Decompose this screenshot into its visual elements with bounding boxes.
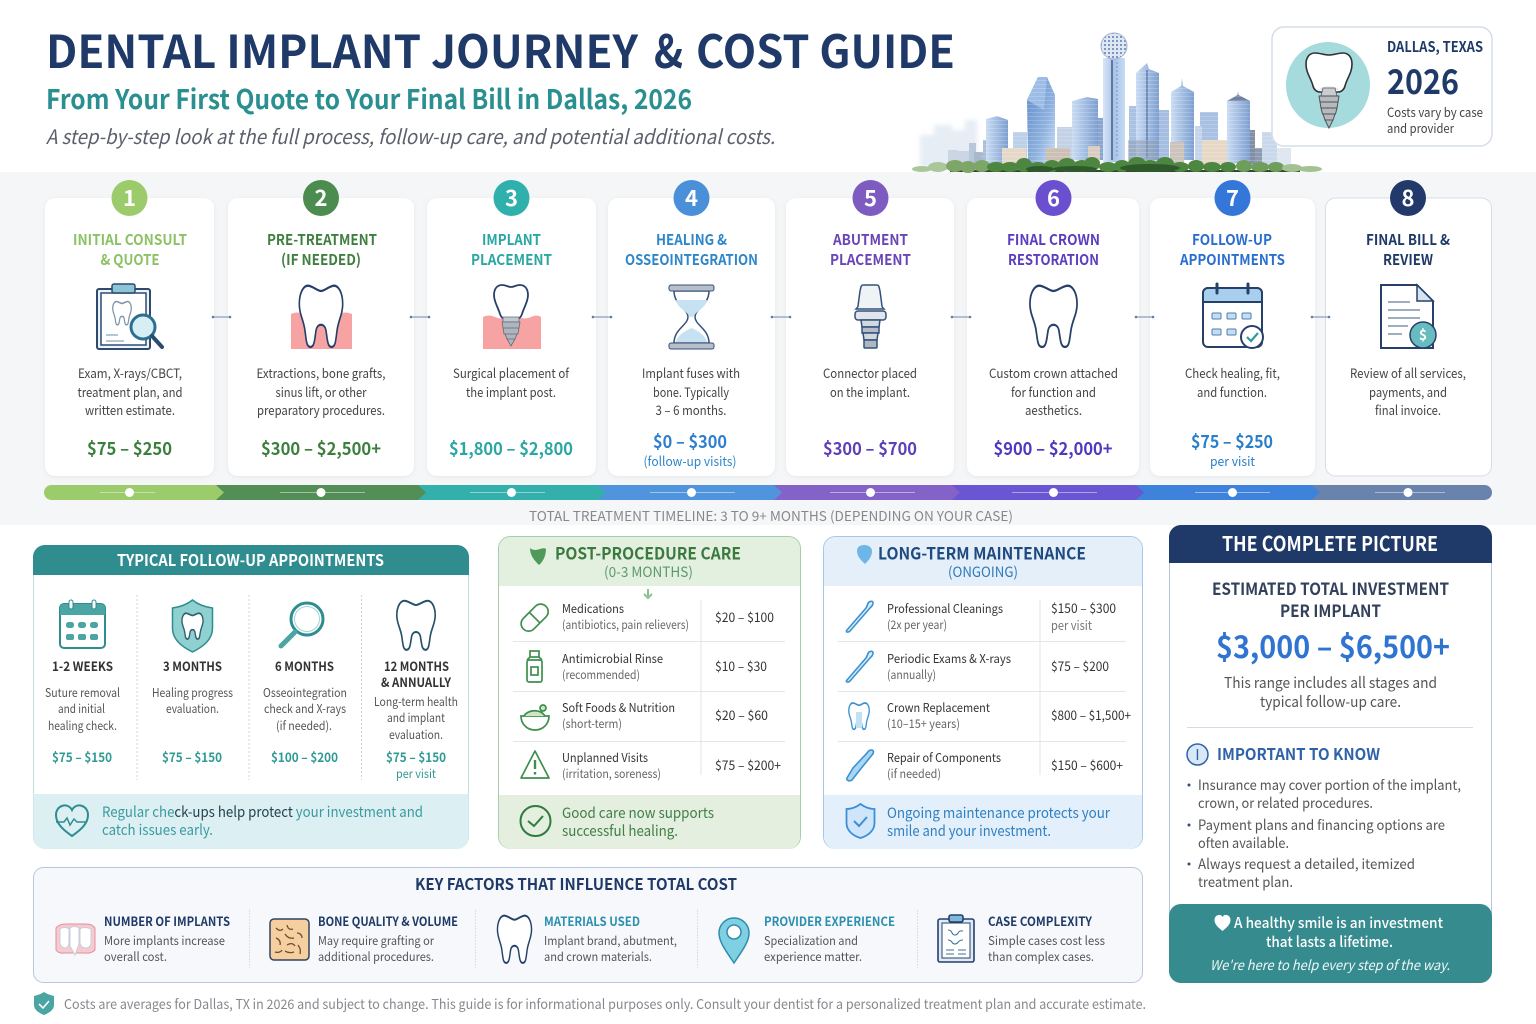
factor: bone quality: May require grafting or	[318, 932, 434, 949]
description	[453, 363, 570, 401]
heading: REVIEW	[1383, 249, 1433, 270]
panel header: (0-3 MONTHS)	[604, 562, 693, 582]
factor: bone quality	[270, 911, 458, 965]
heading: PRE-TREATMENT	[267, 229, 377, 250]
panel: typical follow-up appointments	[33, 545, 469, 849]
step number 8	[1390, 180, 1426, 216]
row: soft foods: Soft Foods & Nutrition	[562, 699, 675, 716]
column: 1-2 weeks: and initial	[58, 700, 105, 717]
step number 5	[852, 180, 888, 216]
row: periodic exams	[846, 650, 1109, 683]
panel header: POST-PROCEDURE CARE	[555, 540, 741, 564]
heading	[267, 229, 377, 270]
bullet list: treatment plan.	[1198, 872, 1293, 892]
callout: ongoing maintenance: Ongoing maintenance protects your	[887, 802, 1110, 823]
investment range: $3,000 – $6,500+	[1216, 623, 1450, 667]
location card	[1272, 27, 1492, 146]
timeline caption: TOTAL TREATMENT TIMELINE: 3 TO 9+ MONTHS (DEPENDING ON YOUR CASE)	[529, 505, 1013, 525]
illustration: Dallas skyline	[912, 33, 1322, 173]
icon: teeth row	[56, 924, 95, 955]
callout: ongoing maintenance: smile and your investment.	[887, 820, 1051, 841]
icon: dental probe	[846, 651, 873, 682]
icon: crown tooth	[1030, 286, 1077, 347]
step number 8: 8	[1402, 181, 1414, 213]
row: repair of components: $150 – $600+	[1051, 755, 1123, 774]
step number 7	[1214, 180, 1250, 216]
description: preparatory procedures.	[257, 400, 385, 419]
heading: IMPLANT	[482, 229, 541, 250]
row: soft foods: (short-term)	[562, 715, 622, 732]
description: final invoice.	[1375, 400, 1441, 419]
description: Check healing, fit,	[1185, 363, 1280, 382]
icon: bottle	[527, 651, 542, 682]
description	[1350, 363, 1466, 419]
heading: PLACEMENT	[830, 249, 911, 270]
step number 4: 4	[685, 181, 698, 213]
factor: case complexity: CASE COMPLEXITY	[988, 911, 1093, 930]
icon: heartbeat	[56, 805, 88, 836]
location text: Costs vary by case	[1387, 102, 1483, 121]
row: crown replacement: Crown Replacement	[887, 699, 990, 716]
column: 3 months: $75 – $150	[162, 747, 222, 766]
icon: Reunion Tower	[1101, 33, 1127, 162]
title	[46, 16, 955, 82]
panel: step 2 pre-treatment	[228, 180, 414, 476]
description	[989, 363, 1118, 419]
title: DENTAL IMPLANT JOURNEY	[46, 16, 639, 82]
column: 12 months: and implant	[387, 709, 445, 726]
row: crown replacement: $800 – $1,500+	[1051, 705, 1131, 724]
row: medications: (antibiotics, pain relievers)	[562, 616, 689, 633]
panel header	[1169, 525, 1492, 563]
factor: provider experience: Specialization and	[764, 932, 858, 949]
callout: regular check-ups	[34, 794, 468, 849]
row: professional cleanings: Professional Cleanings	[887, 600, 1003, 617]
icon: shield check	[846, 804, 874, 838]
investment heading: ESTIMATED TOTAL INVESTMENT	[1212, 575, 1449, 600]
icon: bowl	[521, 705, 549, 730]
factor: materials used: MATERIALS USED	[544, 911, 640, 930]
row: medications: $20 – $100	[715, 607, 774, 626]
icon: invoice	[1381, 285, 1436, 348]
description: Surgical placement of	[453, 363, 570, 382]
heading	[1366, 229, 1450, 270]
price: $300 – $700	[823, 436, 917, 461]
column: 1-2 weeks: 1-2 WEEKS	[52, 656, 113, 675]
column: 6 months: check and X-rays	[264, 700, 346, 717]
icon: toothbrush	[846, 601, 873, 632]
icon: hourglass	[669, 285, 714, 349]
heading: ABUTMENT	[832, 229, 908, 250]
icon: droplet shield	[857, 545, 872, 564]
factor: bone quality: additional procedures.	[318, 948, 434, 965]
callout: good care: Good care now supports	[562, 802, 714, 823]
heading	[1007, 229, 1100, 270]
callout: ongoing maintenance	[824, 795, 1142, 849]
price: $0 – $300	[653, 429, 727, 454]
heading	[1179, 229, 1285, 270]
icon: shield	[34, 992, 54, 1015]
column: 3 months: 3 MONTHS	[163, 656, 222, 675]
column: 6 months: (if needed).	[276, 717, 332, 734]
important to know heading: IMPORTANT TO KNOW	[1217, 741, 1380, 765]
column: 1-2 weeks: Suture removal	[45, 684, 120, 701]
price	[644, 429, 736, 470]
row: crown replacement: (10–15+ years)	[887, 715, 960, 732]
row: antimicrobial rinse: Antimicrobial Rinse	[562, 650, 663, 667]
panel: step 5 abutment	[786, 180, 954, 476]
row: soft foods	[521, 699, 768, 732]
step number 6: 6	[1047, 181, 1060, 213]
heading	[830, 229, 911, 270]
column: 12 months: per visit	[396, 765, 436, 782]
range note: This range includes all stages and	[1224, 672, 1437, 693]
step number 1: 1	[123, 181, 136, 213]
factor: provider experience: experience matter.	[764, 948, 862, 965]
heading: (IF NEEDED)	[281, 249, 361, 270]
column: 6 months: Osseointegration	[263, 684, 347, 701]
heading: FOLLOW-UP	[1192, 229, 1272, 250]
row: medications	[518, 600, 774, 634]
callout: healthy smile: that lasts a lifetime.	[1266, 931, 1393, 952]
price	[1191, 429, 1273, 470]
panel: step 4 healing	[608, 180, 775, 476]
description: Extractions, bone grafts,	[256, 363, 386, 382]
description: the implant post.	[466, 382, 556, 401]
step number 6	[1036, 180, 1072, 216]
range note	[1224, 672, 1437, 712]
factor: materials used: and crown materials.	[544, 948, 652, 965]
icon: check circle	[520, 806, 550, 836]
column: 6 months: 6 MONTHS	[275, 656, 334, 675]
bullet list: often available.	[1198, 833, 1289, 853]
column: 3 months: evaluation.	[166, 700, 219, 717]
tagline: A step-by-step look at the full process, follow-up care, and potential additional costs.	[46, 121, 775, 150]
row: professional cleanings: per visit	[1051, 615, 1092, 634]
step number 3: 3	[505, 181, 518, 213]
bullet list: Insurance may cover portion of the implant,	[1198, 775, 1461, 795]
description	[256, 363, 386, 419]
column: 1-2 weeks: healing check.	[48, 717, 117, 734]
factor: bone quality: BONE QUALITY & VOLUME	[318, 911, 458, 930]
description	[823, 363, 917, 401]
panel header	[824, 537, 1142, 586]
column: 1-2 weeks	[45, 600, 120, 766]
description	[642, 363, 740, 419]
investment heading	[1212, 575, 1449, 622]
heading: OSSEOINTEGRATION	[625, 249, 758, 270]
panel header	[499, 537, 800, 598]
description: bone. Typically	[653, 382, 729, 401]
callout: healthy smile	[1169, 904, 1492, 983]
column: 12 months: Long-term health	[374, 693, 458, 710]
step number 2: 2	[315, 181, 327, 213]
location text: DALLAS, TEXAS	[1387, 36, 1483, 57]
panel header: TYPICAL FOLLOW-UP APPOINTMENTS	[117, 547, 384, 571]
icon: dental implant	[1286, 42, 1370, 128]
icon: magnifier	[281, 603, 323, 646]
icon: info	[1187, 744, 1208, 765]
description: written estimate.	[85, 400, 175, 419]
row: crown replacement	[849, 699, 1131, 732]
factor: case complexity: Simple cases cost less	[988, 932, 1105, 949]
row: professional cleanings: $150 – $300	[1051, 598, 1116, 617]
column: 6 months	[263, 603, 347, 766]
row: repair of components: (if needed)	[887, 765, 941, 782]
icon: warning triangle	[521, 751, 549, 778]
row: soft foods: $20 – $60	[715, 705, 768, 724]
factor: materials used: Implant brand, abutment,	[544, 932, 677, 949]
description: 3 – 6 months.	[656, 400, 726, 419]
column: 12 months	[374, 601, 458, 782]
panel header: (ONGOING)	[948, 562, 1018, 582]
description: Exam, X-rays/CBCT,	[78, 363, 182, 382]
location text: and provider	[1387, 118, 1454, 137]
icon: clipboard chart	[938, 915, 974, 962]
callout: good care	[499, 795, 800, 849]
price: $75 – $250	[87, 436, 172, 461]
title: COST GUIDE	[696, 16, 955, 82]
column: 12 months: 12 MONTHS	[384, 656, 449, 675]
heading: HEALING &	[656, 229, 727, 250]
factor: number of implants: More implants increase	[104, 932, 225, 949]
heading: FINAL CROWN	[1007, 229, 1100, 250]
icon: leaf	[530, 548, 546, 565]
heading: APPOINTMENTS	[1179, 249, 1285, 270]
panel: step 1 initial consult	[45, 180, 214, 476]
icon: tooth shield	[172, 600, 212, 652]
factor: provider experience	[719, 911, 895, 965]
column: 3 months: Healing progress	[152, 684, 233, 701]
panel header	[33, 545, 469, 575]
row: repair of components: Repair of Components	[887, 749, 1001, 766]
description: for function and	[1011, 382, 1096, 401]
description: on the implant.	[830, 382, 910, 401]
icon: clipboard and magnifier	[97, 284, 162, 349]
factor: materials used	[497, 911, 677, 965]
description: treatment plan, and	[78, 382, 182, 401]
description: and function.	[1197, 382, 1267, 401]
panel: post-procedure care	[498, 536, 800, 849]
price: $75 – $250	[1191, 429, 1273, 454]
heading	[471, 229, 552, 270]
panel heading: KEY FACTORS THAT INFLUENCE TOTAL COST	[415, 871, 737, 895]
icon: calendar with check	[1203, 284, 1263, 348]
column: 12 months: $75 – $150	[386, 747, 446, 766]
price: $1,800 – $2,800	[449, 436, 573, 461]
row: repair of components	[847, 749, 1123, 782]
callout: healthy smile: A healthy smile is an investment	[1234, 912, 1443, 933]
row: professional cleanings: (2x per year)	[887, 616, 947, 633]
row: antimicrobial rinse	[527, 650, 767, 683]
row: unplanned visits: (irritation, soreness)	[562, 765, 661, 782]
heading: PLACEMENT	[471, 249, 552, 270]
step number 4	[674, 180, 710, 216]
heading: FINAL BILL &	[1366, 229, 1450, 250]
heading	[625, 229, 758, 270]
column: 12 months: & ANNUALLY	[381, 672, 451, 691]
row: professional cleanings	[846, 598, 1116, 634]
step number 1	[112, 180, 148, 216]
bullet list: crown, or related procedures.	[1198, 793, 1373, 813]
panel: key factors	[34, 868, 1142, 982]
bullet list: Payment plans and financing options are	[1198, 815, 1445, 835]
step number 7: 7	[1226, 181, 1239, 213]
description: Implant fuses with	[642, 363, 740, 382]
factor: case complexity: than complex cases.	[988, 948, 1094, 965]
panel header: THE COMPLETE PICTURE	[1222, 528, 1438, 557]
description: Custom crown attached	[989, 363, 1118, 382]
factor: provider experience: PROVIDER EXPERIENCE	[764, 911, 895, 930]
icon: bone texture	[270, 919, 309, 960]
price: (follow-up visits)	[644, 451, 736, 470]
icon: heart	[1214, 915, 1230, 931]
heading: RESTORATION	[1008, 249, 1099, 270]
description	[78, 363, 182, 419]
factor: number of implants: overall cost.	[104, 948, 167, 965]
row: unplanned visits: Unplanned Visits	[562, 749, 648, 766]
icon: implant in gum	[483, 285, 541, 349]
row: periodic exams: Periodic Exams & X-rays	[887, 650, 1011, 667]
price: per visit	[1210, 451, 1255, 470]
location text	[1387, 36, 1483, 137]
subtitle: From Your First Quote to Your Final Bill in Dallas, 2026	[46, 78, 692, 117]
column: 1-2 weeks: $75 – $150	[52, 747, 112, 766]
icon: crown	[849, 703, 869, 729]
column: 6 months: $100 – $200	[271, 747, 338, 766]
description: sinus lift, or other	[276, 382, 367, 401]
panel: the complete picture	[1169, 525, 1492, 983]
step number 3	[494, 180, 530, 216]
description: Connector placed	[823, 363, 917, 382]
title: &	[654, 16, 683, 82]
row: antimicrobial rinse: $10 – $30	[715, 656, 767, 675]
icon: calendar	[60, 600, 105, 648]
heading	[73, 229, 187, 270]
row: periodic exams: $75 – $200	[1051, 656, 1109, 675]
panel: long-term maintenance	[824, 536, 1142, 849]
icon: capsule	[518, 601, 551, 634]
callout: healthy smile: We're here to help every step of the way.	[1210, 954, 1450, 974]
row: periodic exams: (annually)	[887, 666, 936, 683]
row: antimicrobial rinse: (recommended)	[562, 666, 640, 683]
row: unplanned visits: $75 – $200+	[715, 755, 781, 774]
panel: step 3 implant placement	[427, 180, 596, 476]
panel: step 8 final bill	[1326, 180, 1492, 476]
bullet list	[1188, 775, 1461, 892]
icon: tooth	[497, 916, 532, 963]
panel header: LONG-TERM MAINTENANCE	[878, 540, 1086, 564]
row: medications: Medications	[562, 600, 624, 617]
callout: regular check-ups: Regular check-ups help protect your investment and	[102, 801, 423, 822]
range note: typical follow-up care.	[1260, 691, 1401, 712]
column: 12 months: evaluation.	[389, 726, 443, 743]
trees	[912, 157, 1322, 173]
icon: tool	[847, 750, 874, 781]
step number 2	[303, 180, 339, 216]
description	[1185, 363, 1280, 401]
description: payments, and	[1369, 382, 1447, 401]
factor: number of implants	[56, 911, 230, 965]
timeline bar	[44, 485, 1494, 500]
price: $900 – $2,000+	[994, 436, 1112, 461]
description: aesthetics.	[1025, 400, 1082, 419]
location text: 2026	[1387, 55, 1459, 104]
callout: good care: successful healing.	[562, 820, 678, 841]
heading: INITIAL CONSULT	[73, 229, 187, 250]
bullet list: Always request a detailed, itemized	[1198, 854, 1415, 874]
step number 5: 5	[864, 181, 877, 213]
icon: invoice: $	[1419, 325, 1427, 345]
icon: tooth outline	[397, 601, 435, 650]
panel: step 6 final crown	[967, 180, 1139, 476]
column: 3 months	[152, 600, 233, 766]
icon: abutment	[855, 285, 886, 348]
icon: info: I	[1195, 744, 1200, 765]
factor: number of implants: NUMBER OF IMPLANTS	[104, 911, 230, 930]
investment heading: PER IMPLANT	[1280, 597, 1381, 622]
step connectors	[212, 316, 1330, 318]
row: unplanned visits	[521, 749, 781, 782]
panel: step 7 follow-up	[1150, 180, 1315, 476]
price: $300 – $2,500+	[261, 436, 381, 461]
icon: tooth in gum	[291, 286, 352, 349]
callout: regular check-ups: catch issues early.	[102, 819, 213, 840]
description: Review of all services,	[1350, 363, 1466, 382]
factor: case complexity	[938, 911, 1105, 965]
disclaimer: Costs are averages for Dallas, TX in 2026 and subject to change. This guide is for informational purposes only. Consult your dentist for a personalized treatment plan and accurate estimate.	[64, 993, 1146, 1013]
heading: & QUOTE	[100, 249, 160, 270]
icon: location pin	[719, 918, 749, 963]
